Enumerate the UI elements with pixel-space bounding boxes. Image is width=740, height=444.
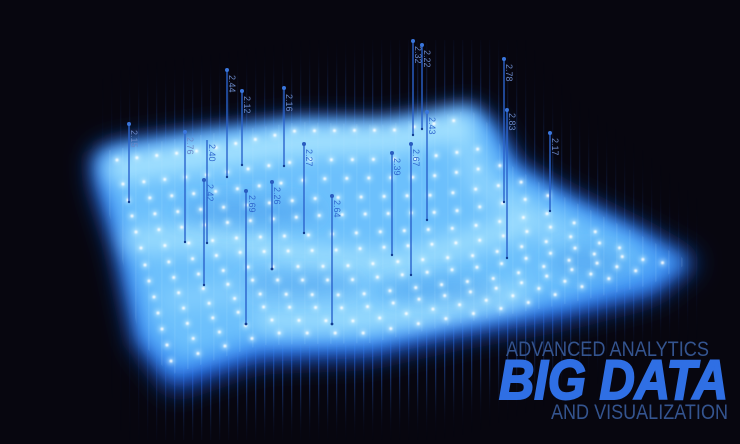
pin 2.26 [270,180,282,270]
pin 2.15: 2.15 [129,130,139,148]
pin 2.44 [225,68,237,178]
bright folds of the surface [118,124,560,322]
pin 2.17 [548,131,560,212]
pin 2.76: 2.76 [185,137,195,155]
pin 2.69 [244,189,257,325]
pin 2.42 [202,178,215,286]
pin 2.22 [420,43,432,130]
pin 2.15 [127,122,139,203]
pin 2.40 [206,140,217,244]
infographic canvas [72,39,727,438]
pin 2.42: 2.42 [205,184,215,202]
pin 2.39: 2.39 [392,158,402,176]
pin 2.32: 2.32 [413,46,423,64]
pin 2.16 [282,86,294,167]
pin 2.26: 2.26 [272,187,282,205]
vertical light streaks [100,40,700,440]
pin 2.12 [240,89,252,166]
glowing data surface [92,100,700,392]
pin 2.22: 2.22 [422,50,432,68]
pin 2.40: 2.40 [207,144,217,162]
pin 2.64 [330,194,342,325]
data point glow [117,118,665,361]
pin 2.69: 2.69 [247,195,257,213]
pin 2.44: 2.44 [227,75,237,93]
surface streaks [109,112,682,374]
darker blue hollows [180,198,630,300]
pin 2.78: 2.78 [504,64,514,82]
pin 2.76 [183,130,195,243]
data pins with value labels [127,39,560,325]
title: advanced analytics: ADVANCED ANALYTICS [506,338,709,361]
pin 2.17: 2.17 [550,138,560,156]
pin 2.67 [409,142,421,276]
pin 2.64: 2.64 [332,200,342,218]
pin 2.27 [302,142,314,234]
pin 2.67: 2.67 [411,149,421,167]
pin 2.16: 2.16 [284,94,294,112]
pin 2.83 [505,108,517,259]
title block [499,338,728,424]
data points [117,118,665,361]
pin 2.78 [502,57,514,203]
pin 2.43 [425,110,437,221]
pin 2.43: 2.43 [427,117,437,135]
pin 2.83: 2.83 [507,113,517,131]
pin 2.27: 2.27 [304,149,314,167]
pin 2.12: 2.12 [242,96,252,114]
pin 2.39 [390,151,402,256]
pin 2.32 [411,39,423,136]
